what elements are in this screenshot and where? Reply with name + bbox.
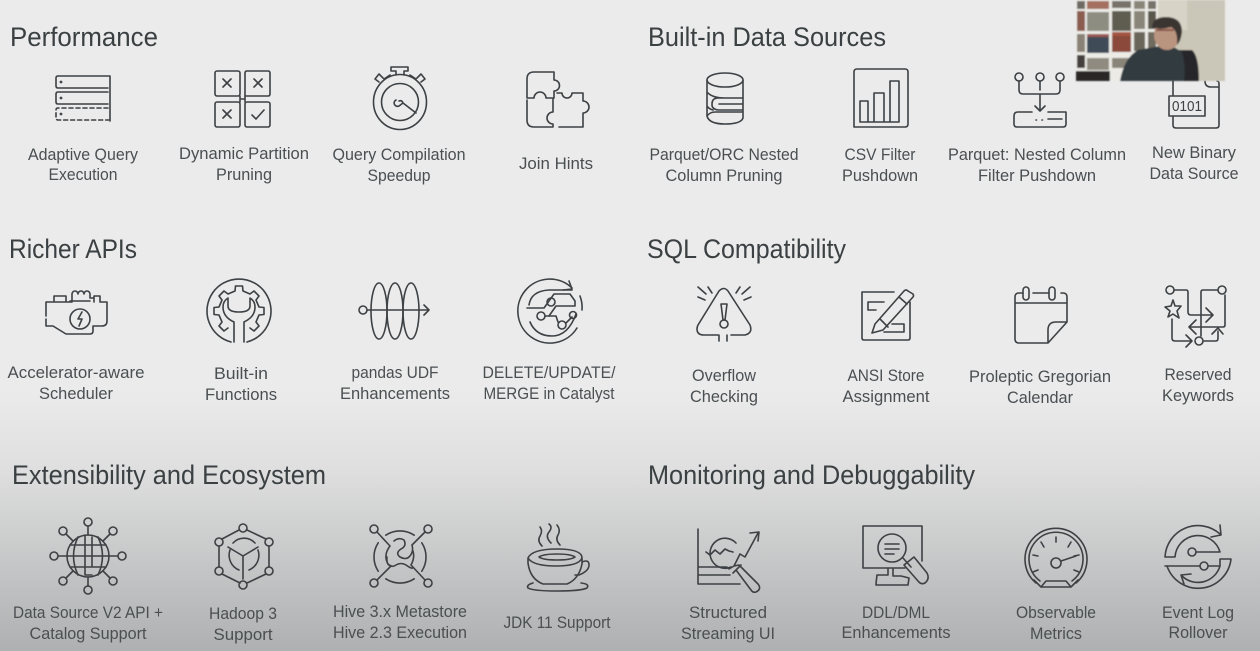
icon: adaptive query stack xyxy=(56,76,110,121)
heading: SQL Compatibility: SQL Compatibility xyxy=(647,234,846,264)
icon: event log rollover xyxy=(1165,525,1231,588)
heading: Performance: Performance xyxy=(10,22,158,52)
label: Accelerator-aware Scheduler: Scheduler xyxy=(39,384,113,403)
label: DDL/DML Enhancements: DDL/DML xyxy=(862,603,930,622)
icon: overflow warning xyxy=(697,287,751,341)
label: Query Compilation Speedup: Query Compilation xyxy=(332,145,466,164)
icon: binary document xyxy=(1169,81,1219,128)
icon: gauge metrics xyxy=(1025,528,1087,587)
label: ANSI Store Assignment: Assignment xyxy=(842,387,930,406)
label: Hadoop 3 Support: Hadoop 3 xyxy=(209,604,277,623)
panel: SQL Compatibility xyxy=(647,234,1234,407)
icon: accelerator engine xyxy=(46,291,107,334)
label: Event Log Rollover: Event Log xyxy=(1162,603,1234,622)
panel: Performance xyxy=(10,22,593,185)
icon: binary document: 0101 xyxy=(1172,98,1202,115)
label: Observable Metrics: Metrics xyxy=(1030,624,1082,643)
icon: data source globe xyxy=(50,518,126,594)
label: pandas UDF Enhancements: pandas UDF xyxy=(352,363,438,382)
label: DELETE/UPDATE/MERGE in Catalyst: DELETE/UPDATE/ xyxy=(482,363,616,382)
label: Data Source V2 API + Catalog Support: Catalog Support xyxy=(30,624,147,643)
icon: filter pushdown tree xyxy=(1014,73,1066,127)
label: Query Compilation Speedup: Speedup xyxy=(368,166,430,185)
label: Reserved Keywords: Reserved xyxy=(1164,365,1232,384)
icon: Hadoop hexagon xyxy=(215,524,273,589)
icon: monitor with magnifier xyxy=(863,526,928,585)
label: Parquet Nested Column Filter Pushdown: Parquet: Nested Column xyxy=(948,145,1126,164)
icon: pandas UDF waves xyxy=(359,283,429,339)
webcam video overlay xyxy=(1076,0,1225,81)
label: New Binary Data Source: New Binary xyxy=(1152,143,1236,162)
label: New Binary Data Source: Data Source xyxy=(1150,164,1238,183)
icon: coffee cup xyxy=(528,524,589,591)
icon: dynamic partition grid xyxy=(215,71,270,127)
panel: Richer APIs xyxy=(8,234,616,404)
icon: stopwatch xyxy=(374,67,426,130)
panel: Extensibility and Ecosystem xyxy=(12,460,611,644)
label: Hive 3.x Metastore Hive 2.3 Execution: Hive 3.x Metastore xyxy=(333,602,467,621)
panel: Monitoring and Debuggability xyxy=(648,460,1234,643)
icon: CSV bar chart xyxy=(854,69,908,127)
label: CSV Filter Pushdown: Pushdown xyxy=(842,166,918,185)
label: Hadoop 3 Support: Support xyxy=(214,625,273,644)
icon: gear and wrench xyxy=(207,279,271,342)
icon: streaming chart magnifier xyxy=(698,529,760,592)
label: Accelerator-aware Scheduler: Accelerator-aware xyxy=(8,363,144,382)
label: DDL/DML Enhancements: Enhancements xyxy=(842,623,950,642)
icon: reserved keywords paths xyxy=(1165,286,1226,347)
label: Observable Metrics: Observable xyxy=(1016,603,1096,622)
label: Hive 3.x Metastore Hive 2.3 Execution: Hive 2.3 Execution xyxy=(333,623,467,642)
label: Event Log Rollover: Rollover xyxy=(1168,623,1228,642)
label: JDK 11 Support: JDK 11 Support xyxy=(504,613,611,632)
label: Structured Streaming UI: Streaming UI xyxy=(681,624,775,643)
heading: Richer APIs: Richer APIs xyxy=(9,234,137,264)
icon: nested cylinder xyxy=(707,73,743,124)
icon: ANSI store form and pencil xyxy=(862,290,914,340)
icon: puzzle pieces xyxy=(527,72,589,127)
icon: calendar xyxy=(1015,287,1067,343)
panel: Built-in Data Sources xyxy=(648,22,1238,185)
heading: Monitoring and Debuggability: Monitoring and Debuggability xyxy=(648,460,975,490)
label: Proleptic Gregorian Calendar: Proleptic Gregorian xyxy=(969,367,1111,386)
label: Parquet Nested Column Filter Pushdown: Filter Pushdown xyxy=(978,166,1096,185)
icon: catalyst circuit loop xyxy=(518,279,582,343)
label: Adaptive Query Execution: Adaptive Query xyxy=(28,145,138,164)
label: Reserved Keywords: Keywords xyxy=(1162,386,1234,405)
heading: Extensibility and Ecosystem: Extensibility and Ecosystem xyxy=(12,460,326,490)
label: Overflow Checking: Overflow xyxy=(692,366,757,385)
label: Data Source V2 API + Catalog Support: Data Source V2 API + xyxy=(13,603,163,622)
label: Built-in Functions: Built-in xyxy=(214,364,268,383)
label: pandas UDF Enhancements: Enhancements xyxy=(340,384,450,403)
label: Join Hints: Join Hints xyxy=(519,154,593,173)
label: Structured Streaming UI: Structured xyxy=(689,603,767,622)
label: Proleptic Gregorian Calendar: Calendar xyxy=(1007,388,1073,407)
label: Parquet/ORC Nested Column Pruning: Column Pruning xyxy=(666,166,782,185)
label: ANSI Store Assignment: ANSI Store xyxy=(848,366,924,385)
label: Parquet/ORC Nested Column Pruning: Parquet/ORC Nested xyxy=(650,145,798,164)
label: Dynamic Partition Pruning: Pruning xyxy=(216,165,272,184)
label: Overflow Checking: Checking xyxy=(690,387,758,406)
label: Built-in Functions: Functions xyxy=(205,385,277,404)
label: Dynamic Partition Pruning: Dynamic Partition xyxy=(179,144,309,163)
label: Adaptive Query Execution: Execution xyxy=(48,165,118,184)
label: DELETE/UPDATE/MERGE in Catalyst: MERGE in Catalyst xyxy=(484,384,615,403)
icon: Hive metastore xyxy=(370,525,432,587)
label: CSV Filter Pushdown: CSV Filter xyxy=(844,145,916,164)
heading: Built-in Data Sources: Built-in Data Sources xyxy=(648,22,886,52)
